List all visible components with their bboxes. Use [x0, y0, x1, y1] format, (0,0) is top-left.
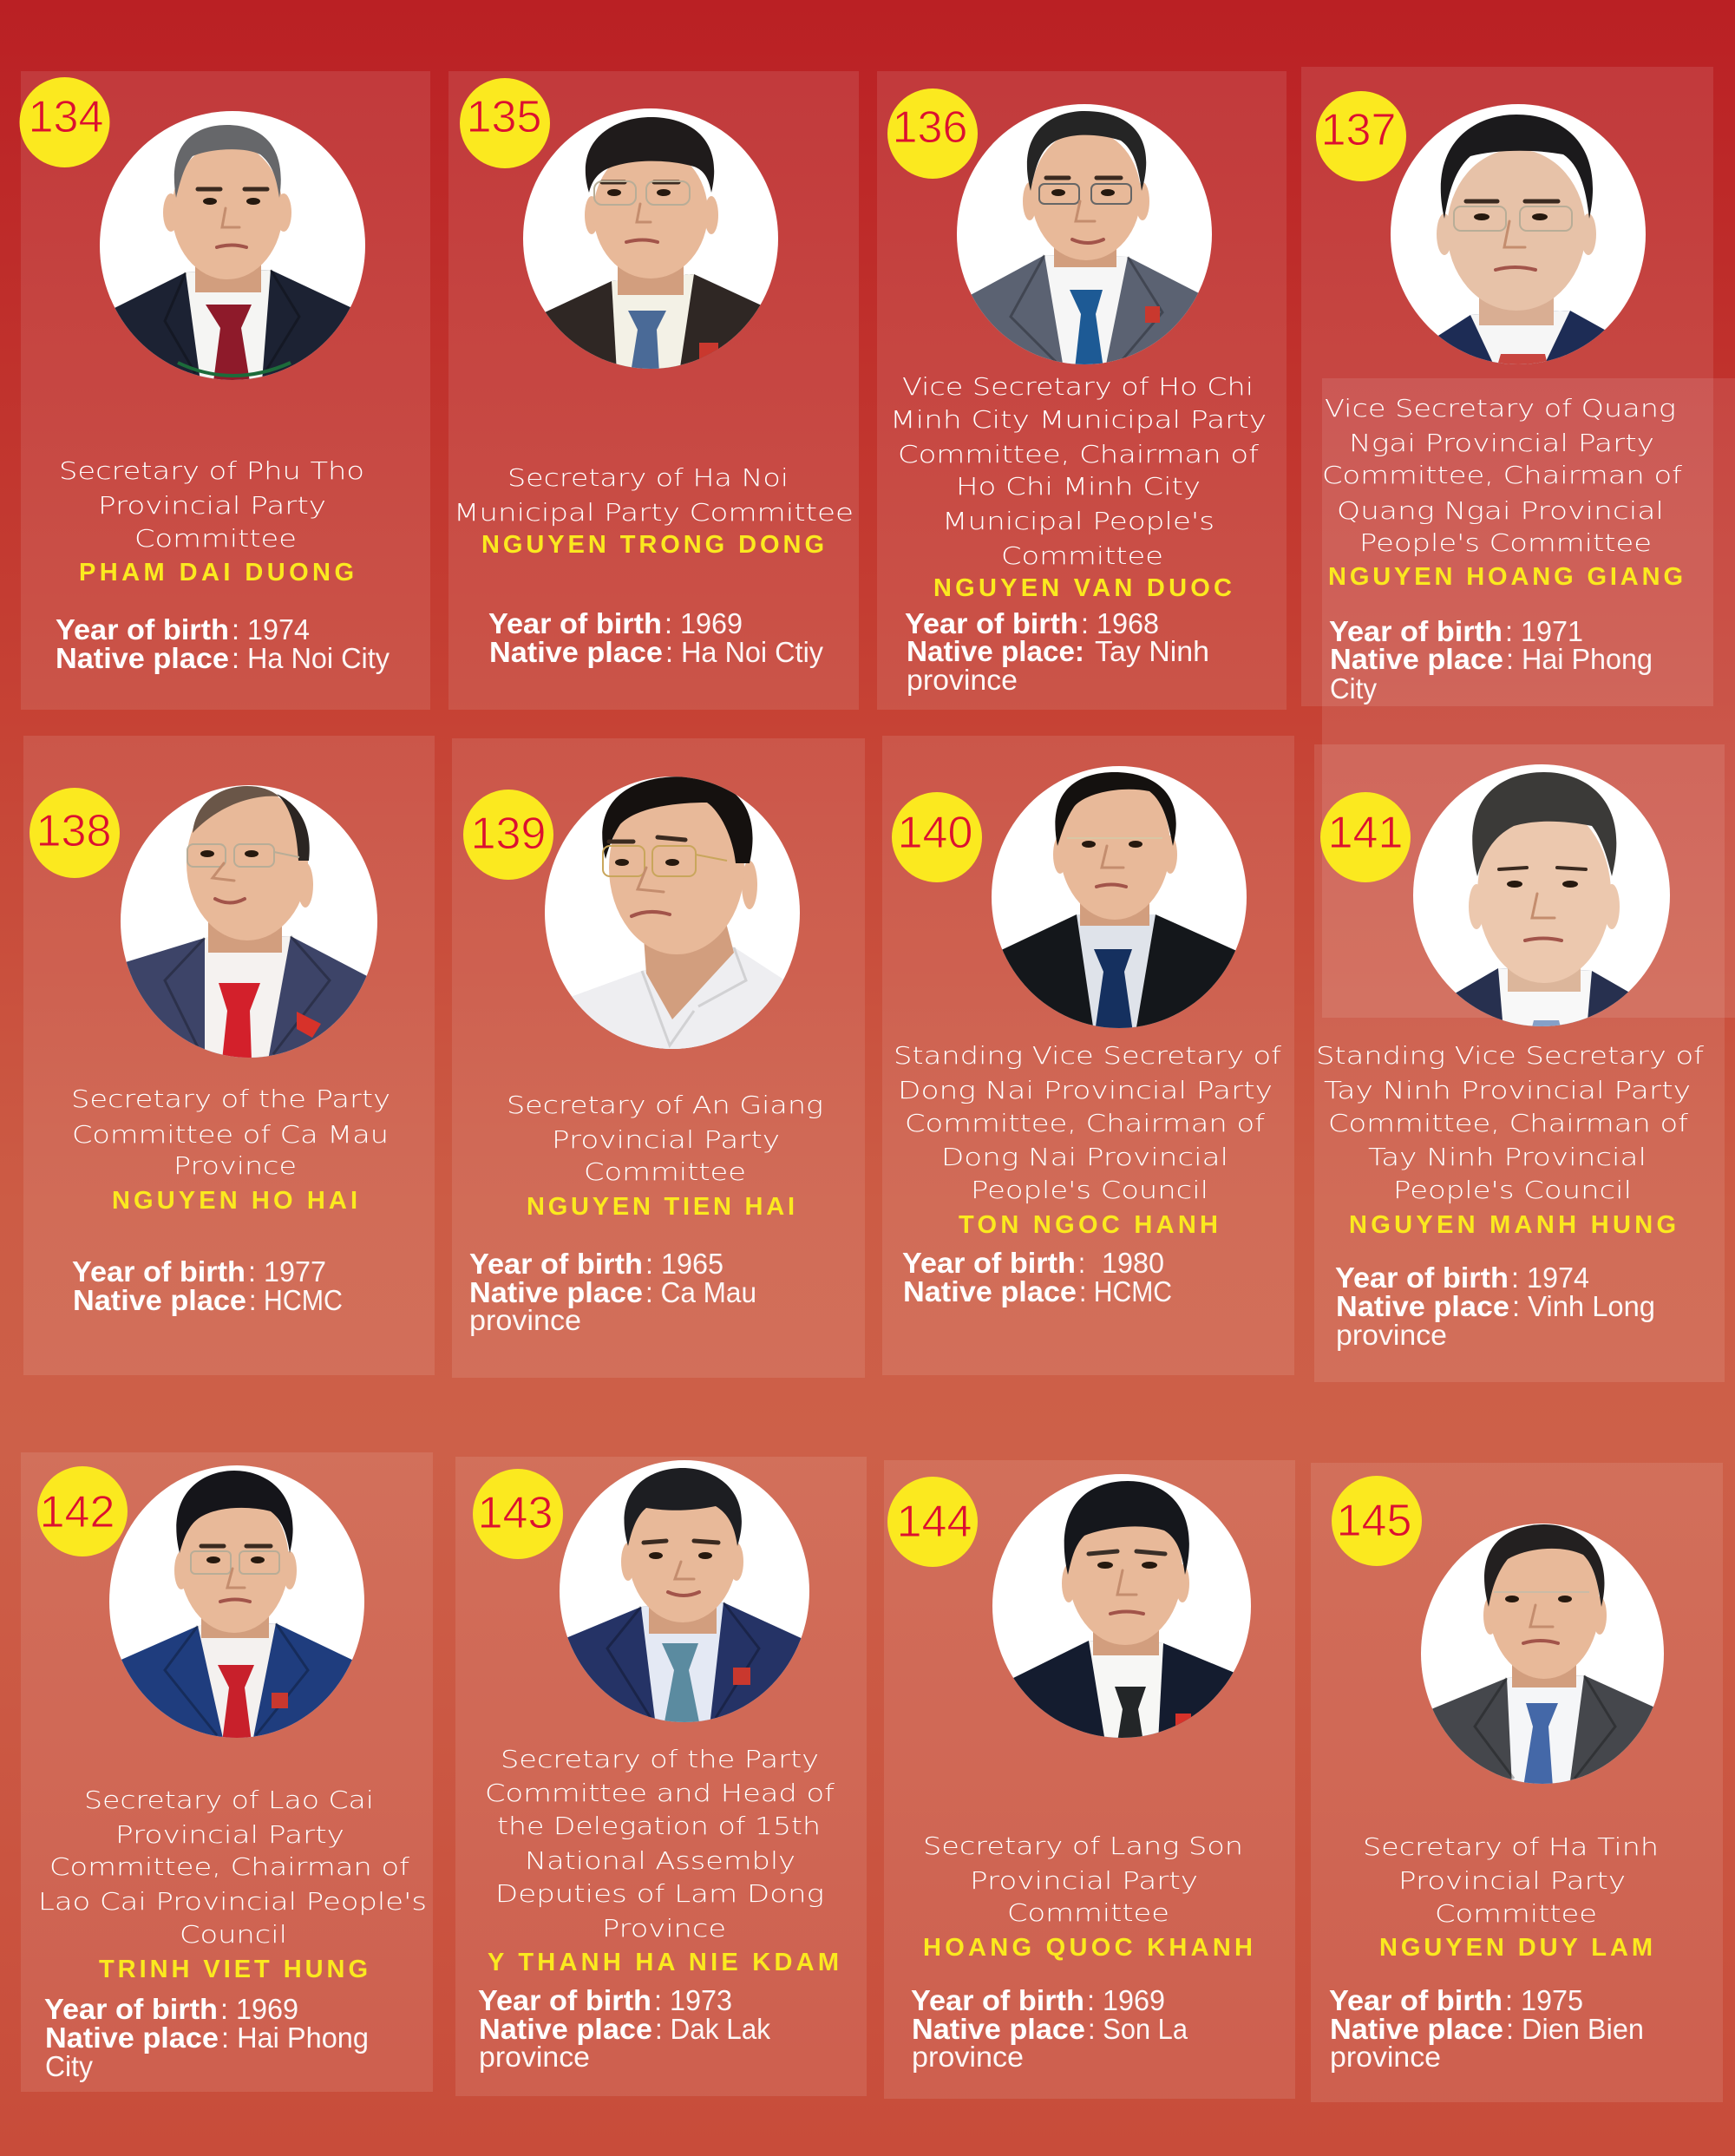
biography — [1335, 1261, 1655, 1351]
role title: Standing Vice Secretary of — [894, 1041, 1281, 1070]
role title: Secretary of An Giang — [507, 1091, 823, 1119]
number badge 145: 145 — [1337, 1496, 1411, 1546]
biography: : 1969 — [665, 607, 743, 639]
biography — [1329, 1984, 1644, 2073]
biography: Year of birth — [902, 1247, 1076, 1279]
number badge 139: 139 — [471, 809, 546, 859]
card 136: Nguyen Van Duoc — [877, 71, 1287, 710]
name: NGUYEN VAN DUOC — [933, 574, 1232, 602]
biography — [44, 1993, 369, 2082]
biography — [56, 613, 390, 674]
card 139: Nguyen Tien Hai — [452, 738, 865, 1378]
biography: Native place: — [907, 635, 1084, 667]
role title: Provincial Party — [970, 1866, 1198, 1895]
number badge 144 — [887, 1477, 978, 1567]
panel — [1301, 67, 1713, 706]
panel — [23, 736, 435, 1375]
number badge 143: 143 — [478, 1488, 553, 1538]
biography: City — [1330, 672, 1377, 704]
biography: Native place — [1336, 1290, 1509, 1322]
biography: province — [469, 1304, 581, 1336]
role title: Committee — [1435, 1899, 1597, 1928]
card 135: Nguyen Trong Dong — [448, 71, 859, 710]
card 143: Y Thanh Ha Nie Kdam — [455, 1457, 867, 2096]
role title — [485, 1745, 835, 1943]
biography: : 1974 — [1511, 1261, 1589, 1294]
role title: Committee, Chairman of — [905, 1109, 1265, 1137]
panel — [448, 71, 859, 710]
role title: Provincial Party — [115, 1820, 344, 1849]
name: TRINH VIET HUNG — [99, 1956, 368, 1983]
number badge 141 — [1320, 792, 1411, 882]
panel — [1311, 1463, 1723, 2102]
number badge 138: 138 — [36, 806, 111, 856]
biography: : Hai Phong — [1506, 643, 1653, 675]
role title: Secretary of the Party — [501, 1745, 819, 1773]
panel — [21, 1452, 433, 2092]
card 141: Nguyen Manh Hung — [1314, 744, 1725, 1382]
biography — [478, 1984, 770, 2073]
biography: : 1977 — [248, 1255, 326, 1288]
role title: Secretary of Phu Tho — [59, 456, 364, 485]
biography: : 1969 — [220, 1993, 298, 2025]
card 140: Ton Ngoc Hanh — [882, 736, 1294, 1375]
number badge 134: 134 — [29, 92, 103, 142]
portrait: Ton Ngoc Hanh — [989, 766, 1254, 1032]
role title: National Assembly — [525, 1846, 795, 1875]
biography — [1329, 615, 1653, 704]
role title: Ngai Provincial Party — [1349, 429, 1654, 457]
number badge 136 — [887, 88, 978, 179]
biography: Native place — [45, 2022, 219, 2054]
biography: : Dak Lak — [655, 2013, 770, 2045]
biography: : Ha Noi City — [232, 642, 390, 674]
number badge 139 — [463, 790, 553, 880]
role title: People's Committee — [1359, 528, 1652, 557]
panel — [21, 71, 430, 710]
role title — [507, 1091, 823, 1186]
biography: 1980 — [1102, 1247, 1164, 1279]
role title: Committee — [584, 1157, 746, 1186]
role title — [38, 1786, 427, 1949]
biography: Year of birth — [469, 1248, 643, 1280]
number badge 138 — [29, 788, 120, 878]
role title: Province — [174, 1151, 297, 1180]
number badge 144: 144 — [897, 1497, 972, 1547]
role title: Committee — [134, 524, 297, 553]
portrait: Hoang Quoc Khanh — [992, 1474, 1254, 1742]
role title: Minh City Municipal Party — [890, 405, 1267, 434]
role title: People's Council — [1393, 1176, 1632, 1204]
biography: Year of birth — [56, 613, 229, 645]
role title: Vice Secretary of Quang — [1325, 394, 1676, 423]
name: NGUYEN TIEN HAI — [527, 1193, 795, 1221]
name: NGUYEN TRONG DONG — [481, 531, 824, 559]
biography — [469, 1248, 756, 1336]
role title: Province — [602, 1914, 726, 1943]
role title: Committee, Chairman of — [1328, 1109, 1688, 1137]
portrait: Nguyen Van Duoc — [954, 104, 1214, 369]
biography: : Hai Phong — [221, 2022, 369, 2054]
number badge 135 — [460, 78, 550, 168]
biography: Native place — [489, 636, 663, 668]
portrait: Trinh Viet Hung — [108, 1465, 369, 1742]
biography: : Vinh Long — [1512, 1290, 1655, 1322]
role title: Tay Ninh Provincial — [1368, 1143, 1647, 1171]
biography: : 1973 — [654, 1984, 732, 2016]
biography: province — [479, 2041, 590, 2073]
role title: Standing Vice Secretary of — [1316, 1041, 1704, 1070]
role title: Committee, Chairman of — [49, 1852, 409, 1881]
biography: Year of birth — [1329, 615, 1503, 647]
name: NGUYEN DUY LAM — [1379, 1934, 1653, 1962]
biography: province — [1330, 2041, 1441, 2073]
role title — [71, 1085, 390, 1180]
role title: Dong Nai Provincial — [941, 1143, 1228, 1171]
role title: Provincial Party — [552, 1125, 780, 1154]
role title: Dong Nai Provincial Party — [898, 1076, 1273, 1104]
role title: Secretary of Ha Tinh — [1363, 1832, 1659, 1861]
biography: Year of birth — [44, 1993, 218, 2025]
biography: Native place — [469, 1276, 643, 1308]
name: NGUYEN HOANG GIANG — [1328, 563, 1683, 591]
role title: Secretary of Lang Son — [923, 1832, 1243, 1860]
role title: Committee — [1007, 1898, 1169, 1927]
portrait: Nguyen Hoang Giang — [1391, 104, 1646, 369]
biography: : 1969 — [1087, 1984, 1165, 2016]
overlay panel behind cards 137 and 141 — [1322, 378, 1735, 1018]
number badge 137 — [1316, 91, 1406, 181]
biography — [72, 1255, 343, 1316]
biography: Year of birth — [1335, 1261, 1509, 1294]
biography — [902, 1247, 1172, 1307]
biography: : 1975 — [1505, 1984, 1583, 2016]
card 145: Nguyen Duy Lam — [1311, 1463, 1723, 2102]
biography: Native place — [1330, 643, 1503, 675]
biography: Native place — [903, 1275, 1077, 1307]
number badge 140 — [892, 792, 982, 882]
biography: Year of birth — [488, 607, 662, 639]
number badge 141: 141 — [1328, 808, 1403, 858]
biography: Year of birth — [478, 1984, 651, 2016]
portrait: Nguyen Ho Hai — [113, 785, 382, 1060]
number badge 142 — [37, 1466, 128, 1556]
biography: : HCMC — [249, 1284, 343, 1316]
name: PHAM DAI DUONG — [79, 559, 354, 587]
card 134: Pham Dai Duong — [19, 71, 430, 710]
biography: Year of birth — [1329, 1984, 1503, 2016]
number badge 134 — [19, 77, 109, 167]
role title — [454, 463, 854, 527]
panel — [882, 736, 1294, 1375]
role title: Committee — [1001, 541, 1163, 570]
panel — [452, 738, 865, 1378]
portrait: Nguyen Tien Hai — [545, 777, 802, 1052]
role title: Ho Chi Minh City — [956, 472, 1201, 501]
role title: Committee of Ca Mau — [72, 1120, 389, 1149]
biography: Native place — [479, 2013, 652, 2045]
biography: Year of birth — [911, 1984, 1084, 2016]
biography: province — [1336, 1319, 1447, 1351]
number badge 145 — [1332, 1476, 1422, 1566]
card 142: Trinh Viet Hung — [21, 1452, 433, 2092]
role title — [1322, 394, 1682, 557]
role title: People's Council — [971, 1176, 1208, 1204]
biography — [911, 1984, 1188, 2073]
biography: : 1974 — [232, 613, 310, 645]
number badge 137: 137 — [1321, 105, 1396, 155]
role title: Secretary of Lao Cai — [84, 1786, 374, 1814]
panel — [1314, 744, 1725, 1382]
portrait: Nguyen Duy Lam — [1414, 1524, 1670, 1787]
role title: Tay Ninh Provincial Party — [1324, 1076, 1691, 1104]
role title: Committee, Chairman of — [898, 440, 1259, 469]
role title: the Delegation of 15th — [497, 1812, 821, 1840]
biography: Tay Ninh — [1095, 635, 1209, 667]
portrait: Pham Dai Duong — [100, 111, 365, 382]
role title: Municipal Party Committee — [454, 498, 854, 527]
panel — [455, 1457, 867, 2096]
biography: : 1965 — [645, 1248, 723, 1280]
biography: : 1971 — [1505, 615, 1583, 647]
role title — [894, 1041, 1281, 1204]
name: TON NGOC HANH — [959, 1211, 1218, 1239]
role title — [923, 1832, 1243, 1927]
role title: Provincial Party — [1398, 1866, 1626, 1895]
number badge 143 — [473, 1469, 563, 1559]
biography: province — [912, 2041, 1024, 2073]
portrait: Y Thanh Ha Nie Kdam — [555, 1460, 809, 1727]
biography: : HCMC — [1079, 1275, 1172, 1307]
biography: : 1968 — [1081, 607, 1159, 639]
biography — [488, 607, 823, 668]
role title: Secretary of the Party — [71, 1085, 390, 1113]
card 137: Nguyen Hoang Giang — [1301, 67, 1713, 706]
role title — [1363, 1832, 1659, 1928]
name: HOANG QUOC KHANH — [923, 1934, 1253, 1962]
biography: : Ca Mau — [645, 1276, 756, 1308]
role title: Lao Cai Provincial People's — [38, 1887, 427, 1916]
name: NGUYEN HO HAI — [112, 1187, 357, 1215]
biography: City — [45, 2050, 93, 2082]
biography: : Dien Bien — [1506, 2013, 1644, 2045]
role title — [890, 372, 1267, 570]
biography: : Ha Noi Ctiy — [665, 636, 823, 668]
panel — [877, 71, 1287, 710]
card 144: Hoang Quoc Khanh — [884, 1460, 1295, 2099]
role title: Deputies of Lam Dong — [495, 1879, 824, 1908]
role title: Provincial Party — [98, 491, 326, 520]
role title: Vice Secretary of Ho Chi — [902, 372, 1254, 401]
role title: Municipal People's — [942, 507, 1214, 535]
biography: Native place — [73, 1284, 246, 1316]
role title: Committee and Head of — [485, 1779, 835, 1807]
number badge 142: 142 — [40, 1487, 115, 1537]
number badge 140: 140 — [898, 808, 972, 858]
biography: : Son La — [1088, 2013, 1188, 2045]
role title: Committee, Chairman of — [1322, 461, 1682, 489]
name: Y THANH HA NIE KDAM — [488, 1949, 839, 1976]
biography: province — [907, 664, 1018, 696]
biography: Year of birth — [72, 1255, 246, 1288]
biography — [905, 607, 1209, 696]
biography: Native place — [1330, 2013, 1503, 2045]
biography: Native place — [912, 2013, 1085, 2045]
role title: Quang Ngai Provincial — [1337, 496, 1664, 525]
card 138: Nguyen Ho Hai — [23, 736, 435, 1375]
biography: Native place — [56, 642, 229, 674]
role title: Council — [180, 1920, 287, 1949]
role title: Secretary of Ha Noi — [507, 463, 789, 492]
panel — [884, 1460, 1295, 2099]
biography: Year of birth — [905, 607, 1078, 639]
biography: : — [1078, 1247, 1085, 1279]
number badge 135: 135 — [467, 92, 541, 142]
number badge 136: 136 — [893, 102, 967, 153]
role title — [59, 456, 364, 553]
portrait: Nguyen Manh Hung — [1413, 764, 1670, 1031]
portrait: Nguyen Trong Dong — [520, 108, 781, 373]
name: NGUYEN MANH HUNG — [1349, 1211, 1676, 1239]
role title — [1316, 1041, 1704, 1204]
